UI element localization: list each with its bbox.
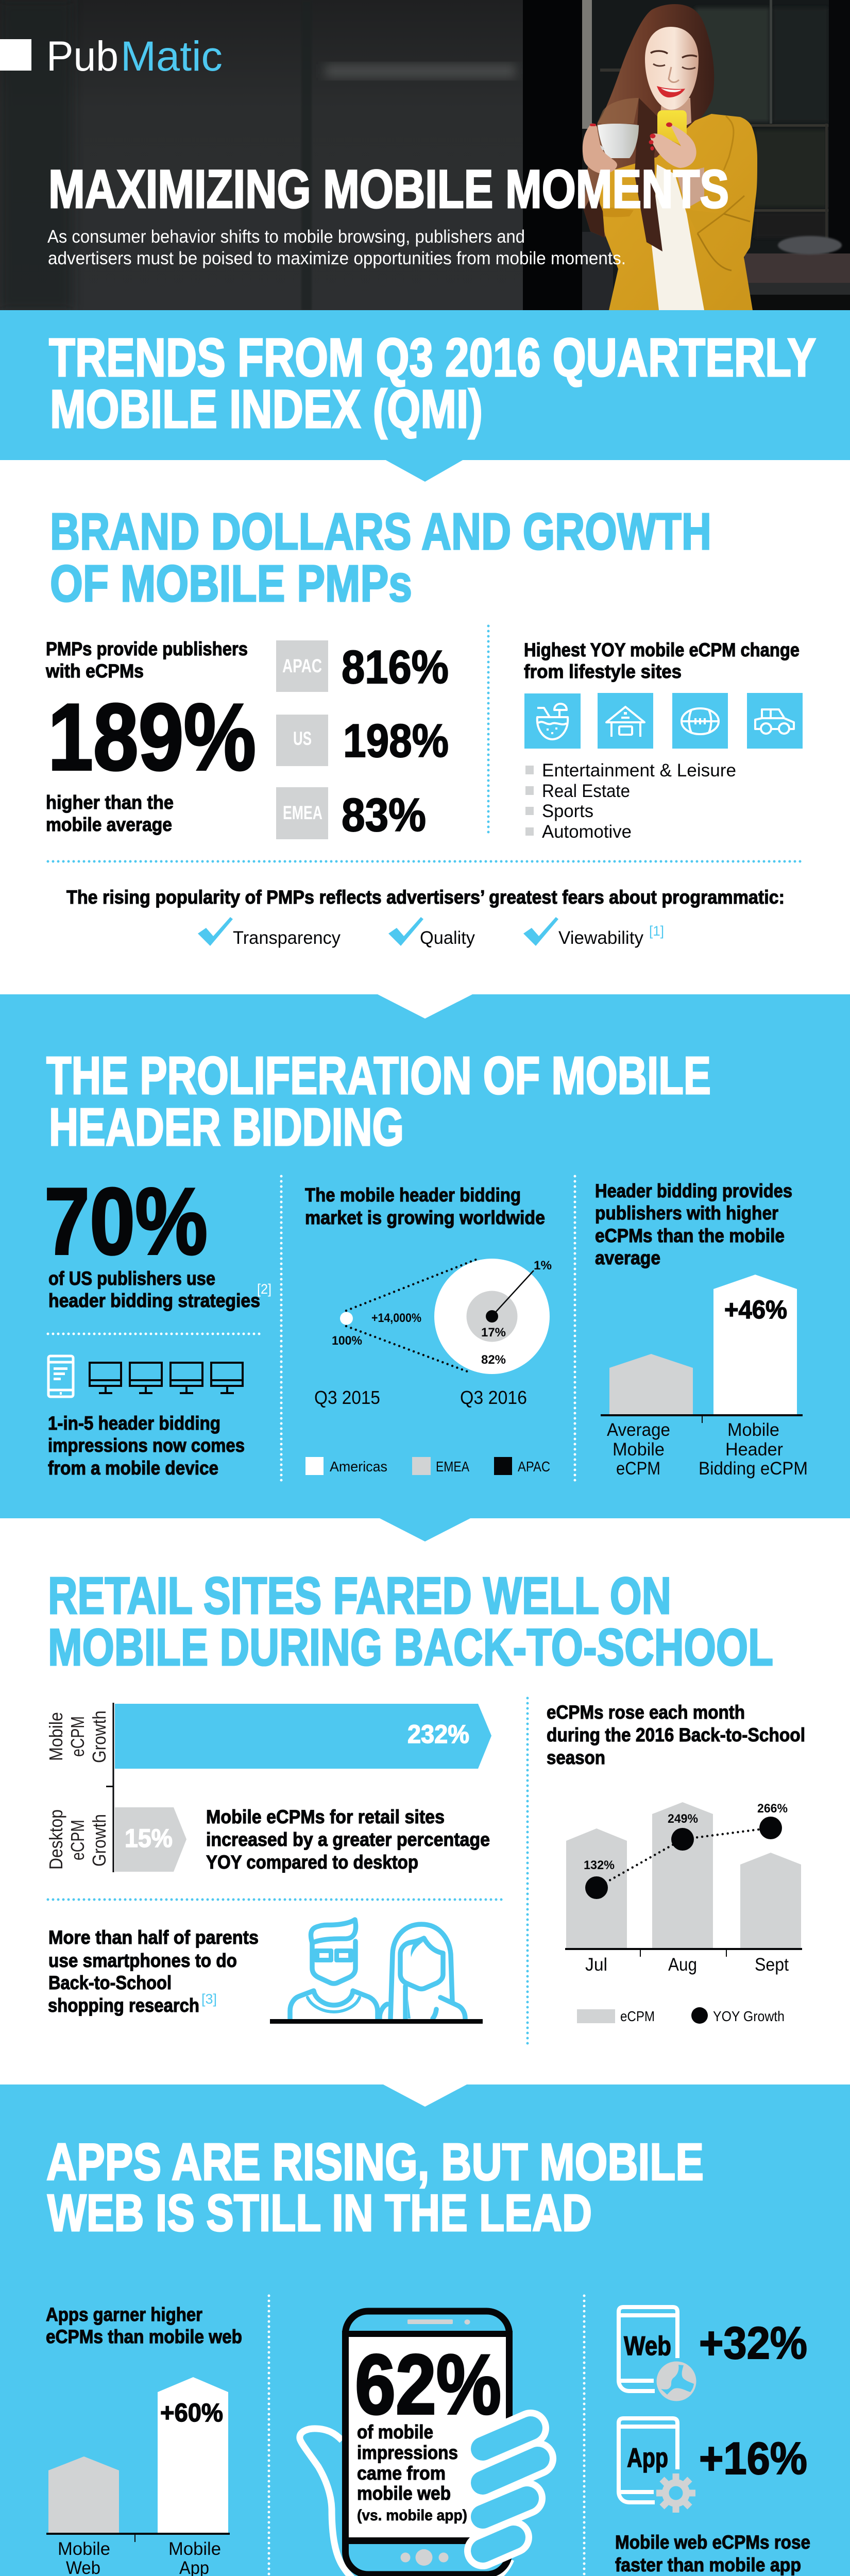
text: eCPMs rose each month: during the 2016 Back-to-School [547,1724,805,1745]
bar chart: web vs app: Mobile [168,2539,221,2559]
stat: 189 percent: PMPs provide publishers [46,638,248,659]
stat: 189 percent [45,638,256,835]
check list: fears: Transparency [233,928,341,948]
legend: eCPM and YOY [577,2007,785,2024]
hero subtitle: As consumer behavior shifts to mobile browsing, publishers and [47,227,525,247]
text: web rose faster: Mobile web eCPMs rose [615,2532,810,2553]
legend: regions: APAC [518,1459,550,1475]
icon: house [598,693,653,749]
icon: two parents [270,1920,483,2024]
stat: 70 percent: 70% [44,1168,208,1274]
stat: 70 percent: of US publishers use [48,1268,215,1289]
panel: header bidding [0,994,850,1541]
bar chart: header bidding eCPM: Header [725,1439,783,1460]
coffee cup [598,124,639,158]
footnote marker 2: [2] [257,1281,271,1297]
chart: regional growth circles: 17% [481,1326,506,1340]
lifestyle sites heading [524,639,800,682]
text: eCPMs rose each month: eCPMs rose each month [547,1702,745,1723]
hair back [584,4,714,251]
stat: 70 percent: header bidding strategies [48,1290,260,1311]
text: market growing: The mobile header bidding [305,1184,521,1206]
text: higher eCPMs: publishers with higher [595,1202,778,1224]
lifestyle sites heading: from lifestyle sites [524,661,682,682]
text: parents [48,1927,259,2016]
stat: app +16 percent: +16% [699,2433,807,2484]
section heading [46,1046,711,1157]
text: 1-in-5 impressions: from a mobile device [48,1458,218,1479]
region stats: 83% [342,789,426,841]
left hand [583,124,617,174]
stat: 62 percent: 62% [355,2337,501,2432]
stat: 62 percent: (vs. mobile app) [357,2507,467,2524]
section heading: WEB IS STILL IN THE LEAD [47,2184,592,2242]
hero panel [0,0,850,310]
phone body [342,2311,513,2574]
bar chart: mobile vs desktop growth [45,1703,491,1872]
text: eCPMs rose each month [547,1702,805,1768]
legend: eCPM and YOY: YOY Growth [713,2008,785,2024]
check list: fears [198,917,664,948]
fingers [483,2428,538,2551]
stat: 62 percent: impressions [357,2442,458,2463]
check list: fears: [1] [649,923,664,939]
bar chart: mobile vs desktop growth: eCPM [67,1716,88,1757]
text: higher eCPMs: eCPMs than the mobile [595,1225,785,1246]
stat: 62 percent: mobile web [357,2483,451,2504]
stat: 62 percent [355,2337,501,2524]
hero photo: woman with phone and coffee [0,0,850,310]
panel: retail sites [45,1567,805,2048]
combo chart: monthly eCPM and YOY growth: 132% [584,1858,615,1872]
text: 1-in-5 impressions [48,1413,245,1479]
forearm [677,167,704,209]
section heading: HEADER BIDDING [49,1097,404,1157]
region stats: 198% [343,715,449,767]
chart: regional growth circles: Q3 2015 [314,1387,380,1408]
text: 1-in-5 impressions: impressions now comes [48,1435,245,1456]
bar chart: header bidding eCPM: eCPM [616,1459,660,1479]
text: higher eCPMs [595,1180,792,1268]
bar chart: header bidding eCPM: Average [607,1420,670,1440]
stat: web +32 percent [619,2307,807,2401]
panel: trends banner [0,310,850,482]
panel: apps vs mobile web [0,2084,850,2576]
hero subtitle [47,227,626,268]
text: parents: shopping research [48,1995,199,2016]
stat: 189 percent: 189% [48,684,256,790]
logo mark [0,39,31,71]
legend: regions [305,1457,550,1475]
cardigan [599,114,757,310]
text: mobile eCPMs increased [206,1806,490,1873]
stat: 62 percent: of mobile [357,2421,433,2443]
section heading [48,1567,773,1676]
text: web rose faster [615,2532,810,2575]
bar chart: mobile vs desktop growth: Growth [89,1814,110,1867]
text: 1-in-5 impressions: 1-in-5 header bidding [48,1413,220,1434]
hair front [635,98,662,251]
section heading: BRAND DOLLARS AND GROWTH [50,503,711,561]
legend: regions: EMEA [436,1459,469,1475]
stat: app +16 percent [619,2418,807,2513]
shirt [652,164,704,310]
bar chart: web vs app [46,2377,230,2576]
legend: regions: Americas [330,1459,387,1475]
region stats: APAC [282,655,322,676]
region stats [276,640,449,841]
bar chart: header bidding eCPM: Mobile [613,1439,665,1460]
icon: phone and four monitors [48,1356,243,1397]
bar chart: web vs app: Mobile [58,2539,110,2559]
lifestyle category list: Sports [542,801,593,821]
combo chart: monthly eCPM and YOY growth: 249% [668,1812,698,1826]
bar chart: mobile vs desktop growth: Growth [89,1710,110,1763]
region stats: 816% [342,641,449,693]
section heading: APPS ARE RISING, BUT MOBILE [46,2133,704,2191]
lifestyle category list [525,760,736,842]
icon: football [672,693,728,749]
bar chart: web vs app: +60% [160,2398,223,2427]
hand outline [300,2429,511,2576]
PubMatic logo: Pub [46,33,118,80]
bar chart: mobile vs desktop growth: Desktop [45,1809,66,1870]
combo chart: monthly eCPM and YOY growth: 266% [757,1802,788,1816]
stat: 70 percent [44,1168,260,1311]
stat: app +16 percent: App [627,2443,668,2473]
panel: brand dollars [45,503,804,948]
lifestyle sites heading: Highest YOY mobile eCPM change [524,639,800,660]
combo chart: monthly eCPM and YOY growth: Aug [668,1955,697,1975]
stat: 189 percent: mobile average [46,814,172,835]
chart: regional growth circles: +14,000% [371,1311,421,1325]
text: parents: use smartphones to do [48,1950,237,1971]
legend: eCPM and YOY: eCPM [620,2008,655,2024]
icon: car [747,693,803,749]
stat: 189 percent: higher than the [46,792,174,813]
combo chart: monthly eCPM and YOY growth [565,1802,802,1975]
chart: regional growth circles [314,1259,552,1408]
lifestyle category list: Entertainment & Leisure [542,760,736,781]
banner heading [49,328,816,439]
text: mobile eCPMs increased: increased by a greater percentage [206,1829,490,1850]
text: apps garner higher: eCPMs than mobile web [46,2326,242,2347]
bar chart: header bidding eCPM: Mobile [727,1420,779,1440]
section heading [46,2133,704,2242]
text: apps garner higher [46,2304,242,2347]
text: eCPMs rose each month: season [547,1747,605,1768]
PubMatic logo: Matic [121,33,223,80]
section heading: OF MOBILE PMPs [50,555,412,613]
text: web rose faster: faster than mobile app [615,2554,801,2575]
bar chart: header bidding eCPM: Bidding eCPM [699,1459,808,1479]
phone [657,110,687,145]
illustration: hand holding phone [300,2311,538,2576]
stat: web +32 percent: Web [624,2331,671,2361]
bar chart: header bidding eCPM [601,1275,808,1479]
bar chart: header bidding eCPM: +46% [724,1295,787,1324]
callout: rising popularity: The rising popularity of PMPs reflects advertisers’ greatest fears about programmatic: [66,887,785,908]
bar chart: mobile vs desktop growth: 15% [125,1824,173,1853]
PubMatic logo [46,33,223,80]
bar chart: mobile vs desktop growth: Mobile [45,1712,66,1761]
chart: regional growth circles: 1% [534,1259,552,1273]
text: market growing: market is growing worldwide [305,1207,545,1228]
text: parents: More than half of parents [48,1927,259,1948]
banner heading: MOBILE INDEX (QMI) [50,379,483,439]
combo chart: monthly eCPM and YOY growth: Sept [755,1955,789,1975]
section heading [50,503,711,613]
icon: coconut drink [524,693,581,749]
check list: fears: Quality [420,928,475,948]
neck and face [660,98,691,125]
text: higher eCPMs: average [595,1247,660,1268]
chart: regional growth circles: 82% [481,1353,506,1367]
check list: fears: Viewability [558,928,643,948]
region stats: US [293,728,312,749]
lifestyle category list: Real Estate [542,781,630,801]
stat: 189 percent: with eCPMs [45,660,144,682]
text: mobile eCPMs increased: YOY compared to desktop [206,1852,418,1873]
right hand [650,124,696,168]
chart: regional growth circles: Q3 2016 [460,1387,527,1408]
bar chart: mobile vs desktop growth: eCPM [67,1820,88,1860]
lifestyle category list: Automotive [542,822,632,842]
text: apps garner higher: Apps garner higher [46,2304,202,2325]
chart: regional growth circles: 100% [332,1334,362,1348]
region stats: EMEA [283,802,322,823]
text: mobile eCPMs increased: Mobile eCPMs for retail sites [206,1806,445,1827]
text: market growing [305,1184,545,1228]
hero subtitle: advertisers must be poised to maximize opportunities from mobile moments. [48,248,626,268]
text: higher eCPMs: Header bidding provides [595,1180,792,1201]
combo chart: monthly eCPM and YOY growth: Jul [585,1955,607,1975]
stat: web +32 percent: +32% [699,2317,807,2368]
text: parents: Back-to-School [48,1972,172,1993]
bar chart: mobile vs desktop growth: 232% [407,1720,469,1749]
section heading: RETAIL SITES FARED WELL ON [48,1567,671,1625]
stat: 62 percent: came from [357,2463,446,2484]
footnote marker 3: [3] [201,1991,217,2007]
